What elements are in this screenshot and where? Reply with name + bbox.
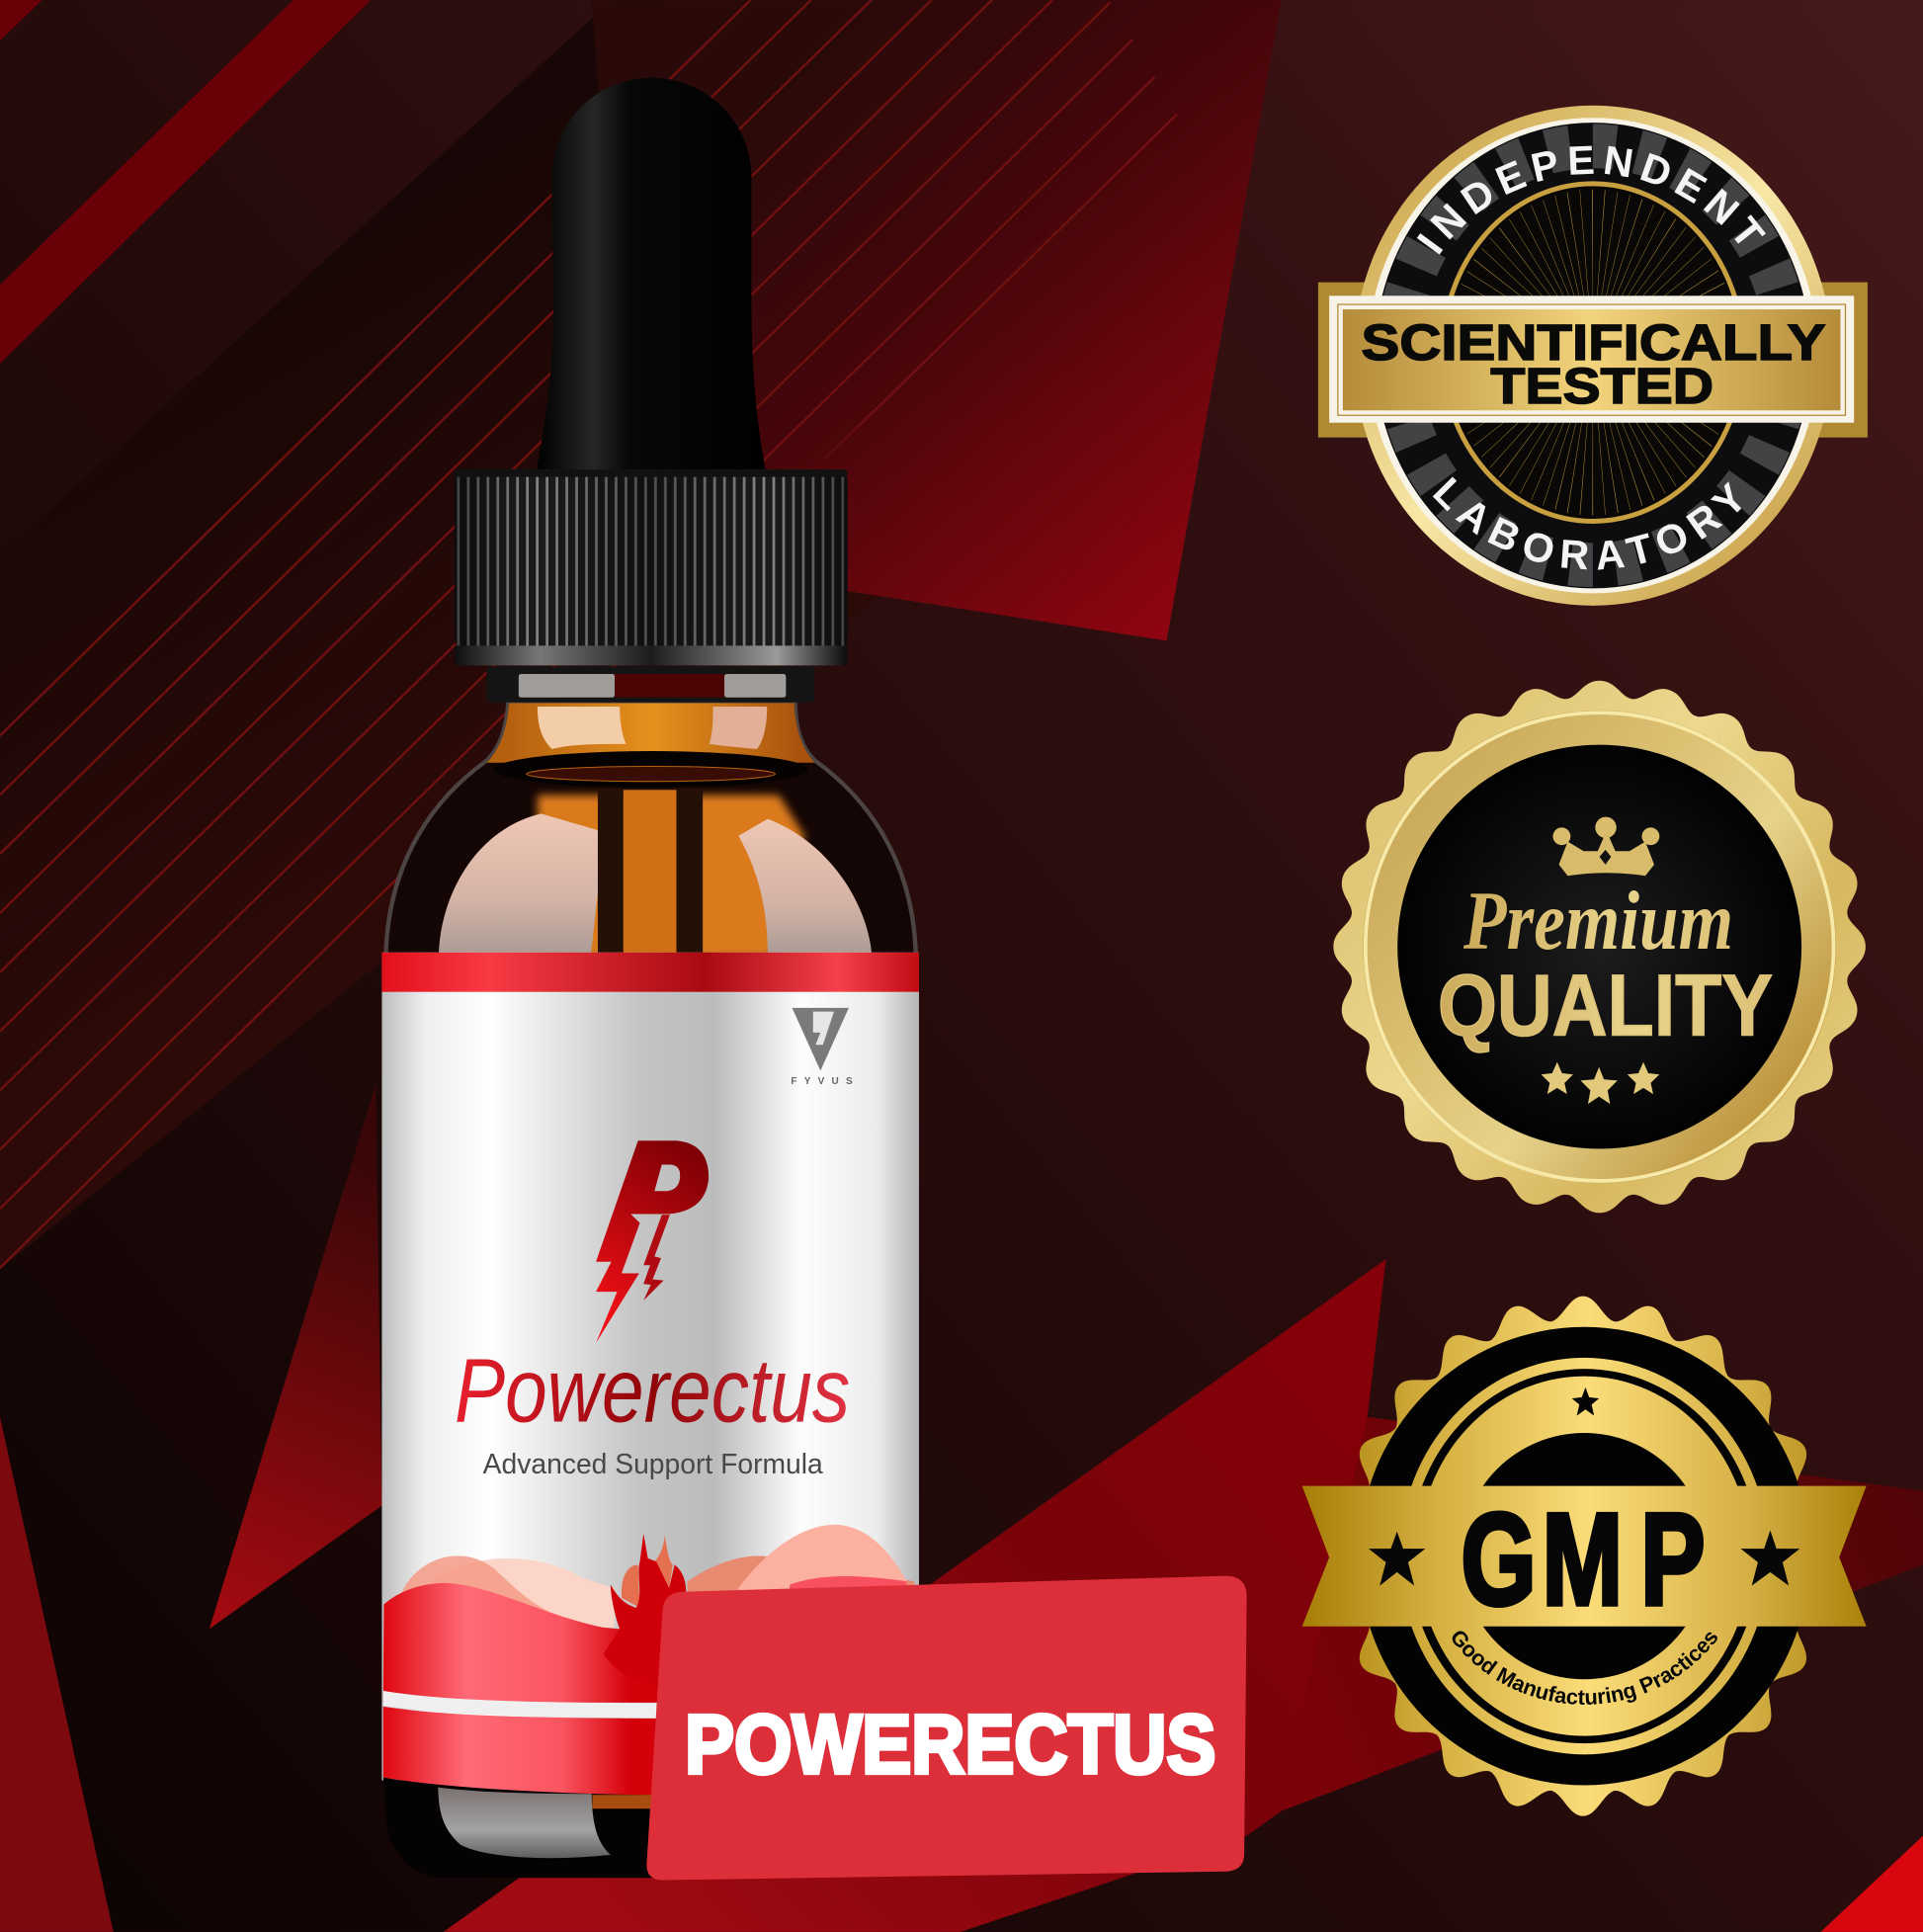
ribbon stars [1369, 1532, 1425, 1586]
brand mark FYVUS [791, 1008, 853, 1087]
arc caption: Good Manufacturing Practices [1453, 1631, 1717, 1705]
badge: GMP [1302, 1297, 1867, 1816]
brand mark FYVUS: FYVUS [791, 1076, 853, 1087]
three stars [1542, 1062, 1659, 1104]
crown icon [1552, 817, 1659, 876]
product name: Powerectus [455, 1339, 850, 1442]
neck collar [486, 667, 814, 703]
badge: scientifically tested: LABORATORY [1433, 476, 1741, 570]
tagline: Advanced Support Formula [483, 1449, 823, 1480]
label [381, 953, 919, 1878]
glass shoulder with amber liquid [385, 704, 916, 959]
premium script: Premium [1463, 875, 1733, 967]
GMP letters: GMP [1462, 1486, 1705, 1633]
inner sunburst [1443, 184, 1743, 521]
ribbon [1329, 295, 1854, 423]
red product card [646, 1576, 1247, 1881]
P lightning logo [596, 1140, 709, 1343]
badge: scientifically tested [1318, 105, 1868, 606]
product bottle [381, 78, 919, 1878]
arc text: INDEPENDENT [1417, 146, 1766, 255]
ribbon: SCIENTIFICALLY [1362, 314, 1826, 371]
top star [1572, 1387, 1599, 1416]
dropper bulb [536, 78, 766, 474]
quality word: QUALITY [1438, 956, 1773, 1053]
ribbed black cap [455, 469, 848, 665]
badge: premium quality [1333, 680, 1866, 1214]
red top band [381, 953, 919, 992]
waves, flame and lower band [383, 1525, 914, 1878]
ribbon: TESTED [1490, 358, 1714, 414]
ribbon [1302, 1486, 1867, 1627]
card wordmark: POWERECTUS [685, 1697, 1215, 1791]
